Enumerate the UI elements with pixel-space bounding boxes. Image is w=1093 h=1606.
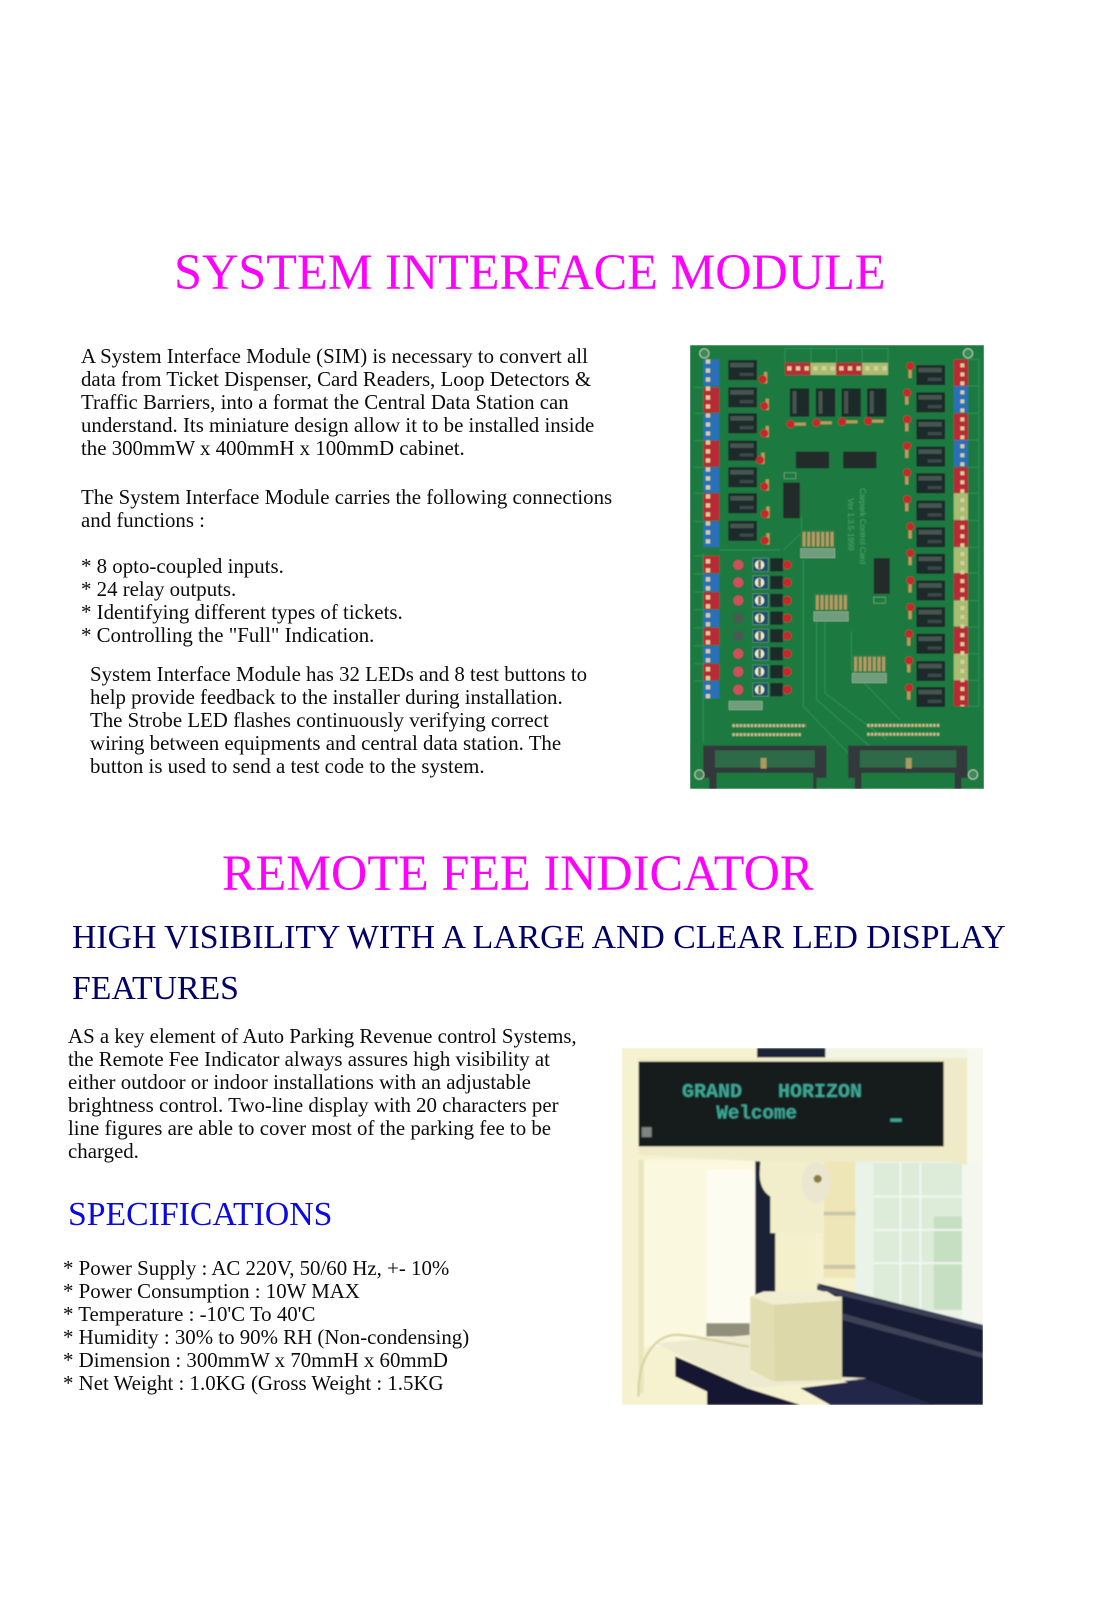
top window strip bbox=[825, 1048, 983, 1058]
text block: specifications list: * Power Consumption : 10W MAX bbox=[63, 1279, 360, 1303]
text block: features description: charged. bbox=[68, 1139, 139, 1163]
LED screen bbox=[639, 1062, 944, 1146]
silkscreen label bbox=[846, 488, 867, 564]
mount bbox=[747, 1162, 867, 1388]
window bbox=[855, 1162, 983, 1325]
photo: remote fee indicator bbox=[622, 1048, 983, 1405]
dark column bbox=[755, 1160, 775, 1300]
text block: connection list: * Identifying different types of tickets. bbox=[81, 600, 403, 624]
text block: specifications list: * Power Supply : AC 220V, 50/60 Hz, +- 10% bbox=[63, 1256, 449, 1280]
mounting holes bbox=[695, 349, 978, 779]
text block: specifications list: * Net Weight : 1.0KG (Gross Weight : 1.5KG bbox=[63, 1371, 444, 1395]
text block: specifications list bbox=[63, 1256, 469, 1395]
text block: LED feedback: wiring between equipments and central data station. The bbox=[90, 731, 561, 755]
left relays bbox=[728, 360, 770, 545]
text block: features description: AS a key element of Auto Parking Revenue control Systems, bbox=[68, 1024, 577, 1048]
left terminals bbox=[703, 359, 719, 698]
cable bbox=[639, 1335, 749, 1396]
test buttons and LEDs bbox=[729, 558, 792, 710]
text block: features description: brightness control. Two-line display with 20 characters per bbox=[68, 1093, 559, 1117]
text block: LED feedback: help provide feedback to the installer during installation. bbox=[90, 685, 563, 709]
LED screen: GRAND HORIZON bbox=[682, 1081, 862, 1103]
sill bbox=[655, 1335, 867, 1388]
text block: connection list bbox=[81, 554, 403, 647]
text block: SIM intro bbox=[81, 344, 594, 460]
heading: high visibility: HIGH VISIBILITY WITH A LARGE AND CLEAR LED DISPLAY bbox=[72, 919, 1006, 956]
display housing bbox=[639, 1058, 967, 1165]
pcb base bbox=[690, 345, 984, 789]
photo: circuit board bbox=[690, 345, 984, 789]
text block: LED feedback: System Interface Module has 32 LEDs and 8 test buttons to bbox=[90, 662, 587, 686]
right relays bbox=[903, 362, 945, 707]
heading: specifications: SPECIFICATIONS bbox=[68, 1196, 332, 1233]
text block: features description: either outdoor or indoor installations with an adjustable bbox=[68, 1070, 531, 1094]
text block: SIM intro: Traffic Barriers, into a format the Central Data Station can bbox=[81, 390, 569, 414]
text block: connection list: * 24 relay outputs. bbox=[81, 577, 236, 601]
text block: features description: line figures are able to cover most of the parking fee to be bbox=[68, 1116, 551, 1140]
wall bbox=[644, 1160, 755, 1346]
text block: specifications list: * Temperature : -10'C To 40'C bbox=[63, 1302, 315, 1326]
text block: LED feedback: The Strobe LED flashes continuously verifying correct bbox=[90, 708, 549, 732]
text block: LED feedback bbox=[90, 662, 587, 778]
text block: connections intro: The System Interface Module carries the following connections bbox=[81, 484, 612, 508]
text block: specifications list: * Dimension : 300mmW x 70mmH x 60mmD bbox=[63, 1348, 448, 1372]
text block: SIM intro: understand. Its miniature design allow it to be installed inside bbox=[81, 413, 594, 437]
silkscreen label: Carpark Control Card bbox=[858, 488, 867, 564]
top relays bbox=[787, 388, 886, 428]
text block: connection list: * 8 opto-coupled inputs. bbox=[81, 554, 284, 578]
title: remote fee indicator: REMOTE FEE INDICATOR bbox=[222, 845, 813, 901]
text block: connection list: * Controlling the "Full" Indication. bbox=[81, 623, 374, 647]
silkscreen label: Ver 1.3.5-1999 bbox=[846, 498, 855, 551]
right terminals bbox=[954, 359, 968, 706]
text block: features description bbox=[68, 1024, 577, 1163]
integrated circuits bbox=[783, 452, 890, 603]
ribbon connectors bbox=[703, 746, 967, 789]
pin rows bbox=[732, 725, 940, 735]
heading: features: FEATURES bbox=[72, 970, 239, 1006]
LED screen: Welcome bbox=[716, 1103, 797, 1125]
text block: features description: the Remote Fee Indicator always assures high visibility at bbox=[68, 1047, 550, 1071]
text block: specifications list: * Humidity : 30% to 90% RH (Non-condensing) bbox=[63, 1325, 469, 1349]
text block: SIM intro: A System Interface Module (SIM) is necessary to convert all bbox=[81, 344, 588, 368]
resistor packs bbox=[801, 530, 886, 683]
text block: connections intro bbox=[81, 484, 612, 532]
text block: LED feedback: button is used to send a test code to the system. bbox=[90, 754, 485, 778]
text block: SIM intro: the 300mmW x 400mmH x 100mmD cabinet. bbox=[81, 436, 465, 460]
text block: SIM intro: data from Ticket Dispenser, Card Readers, Loop Detectors & bbox=[81, 367, 591, 391]
title: system interface module: SYSTEM INTERFACE MODULE bbox=[174, 244, 886, 300]
text block: connections intro: and functions : bbox=[81, 508, 205, 532]
top terminals bbox=[785, 363, 888, 375]
